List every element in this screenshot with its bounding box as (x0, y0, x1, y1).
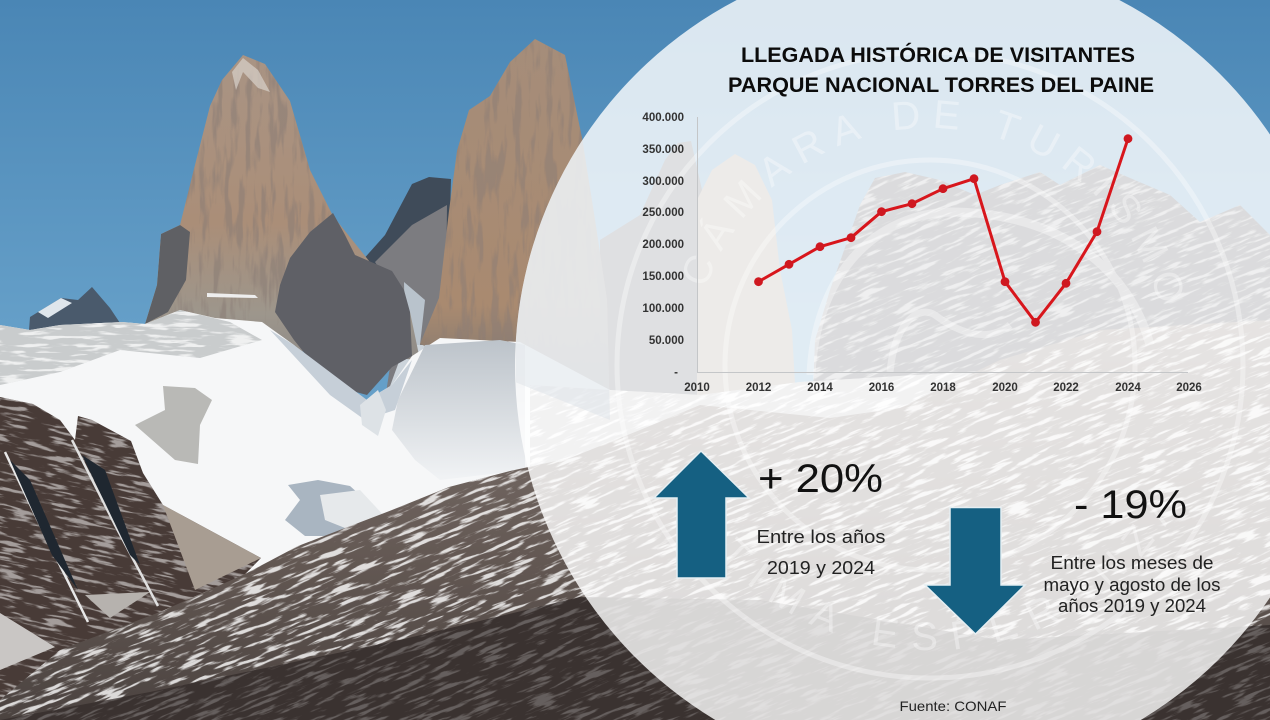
title: LLEGADA HISTÓRICA DE VISITANTES (741, 43, 1135, 67)
x axis labels: 2026 (1176, 382, 1202, 394)
stat: minus 19 percent: - 19% (1074, 483, 1187, 527)
tower one (140, 50, 420, 360)
y axis labels: 250.000 (642, 207, 684, 219)
title (728, 43, 1154, 97)
y axis labels: 400.000 (642, 112, 684, 124)
y axis labels (642, 112, 684, 379)
x axis labels: 2010 (684, 382, 710, 394)
dark left fins (0, 397, 261, 700)
y axis labels: - (674, 367, 678, 379)
y axis labels: 100.000 (642, 303, 684, 315)
stat caption: years (756, 526, 886, 578)
icon: up arrow (654, 451, 749, 578)
lower dark ridge (0, 597, 1270, 720)
watermark: chamber of tourism logo: ÚLTIMA ESPERANZA (727, 500, 1178, 650)
small left peak (29, 287, 122, 330)
tower one shadow (275, 213, 412, 395)
y axis labels: 300.000 (642, 176, 684, 188)
line chart: visitors by year (642, 112, 1202, 394)
stat caption: months: años 2019 y 2024 (1058, 596, 1206, 616)
back ridge (361, 177, 451, 400)
stat: plus 20 percent (756, 457, 886, 578)
title: PARQUE NACIONAL TORRES DEL PAINE (728, 74, 1154, 97)
chart axes (698, 117, 1188, 372)
stat caption: months: mayo y agosto de los (1044, 575, 1220, 595)
stat caption: years: Entre los años (756, 526, 886, 547)
x axis labels: 2018 (930, 382, 956, 394)
x axis labels (684, 382, 1202, 394)
icon: down arrow (925, 508, 1025, 634)
tower two (420, 39, 582, 346)
data line (754, 134, 1132, 327)
massif (813, 165, 1270, 381)
front mountain (0, 320, 1270, 720)
translucent circle panel (515, 0, 1270, 720)
snow field (0, 310, 1270, 650)
cool tint over tower two (516, 140, 610, 420)
stat caption: years: 2019 y 2024 (767, 557, 875, 578)
hidden towers behind circle (600, 141, 797, 420)
y axis labels: 50.000 (649, 335, 684, 347)
x axis labels: 2022 (1053, 382, 1079, 394)
x axis labels: 2016 (869, 382, 894, 394)
watermark: chamber of tourism logo: CÁMARA DE TURISMO (684, 100, 1182, 300)
x axis labels: 2014 (807, 382, 833, 394)
source note: Fuente: CONAF (900, 698, 1006, 714)
y axis labels: 200.000 (642, 239, 684, 251)
x axis labels: 2012 (746, 382, 771, 394)
watermark: chamber of tourism logo (614, 50, 1246, 680)
y axis labels: 350.000 (642, 144, 684, 156)
stat: plus 20 percent: + 20% (758, 457, 883, 501)
y axis labels: 150.000 (642, 271, 684, 283)
x axis labels: 2020 (992, 382, 1018, 394)
stat caption: months (1044, 553, 1220, 616)
stat: minus 19 percent (1044, 483, 1220, 616)
x axis labels: 2024 (1115, 382, 1141, 394)
stat caption: months: Entre los meses de (1050, 553, 1214, 573)
